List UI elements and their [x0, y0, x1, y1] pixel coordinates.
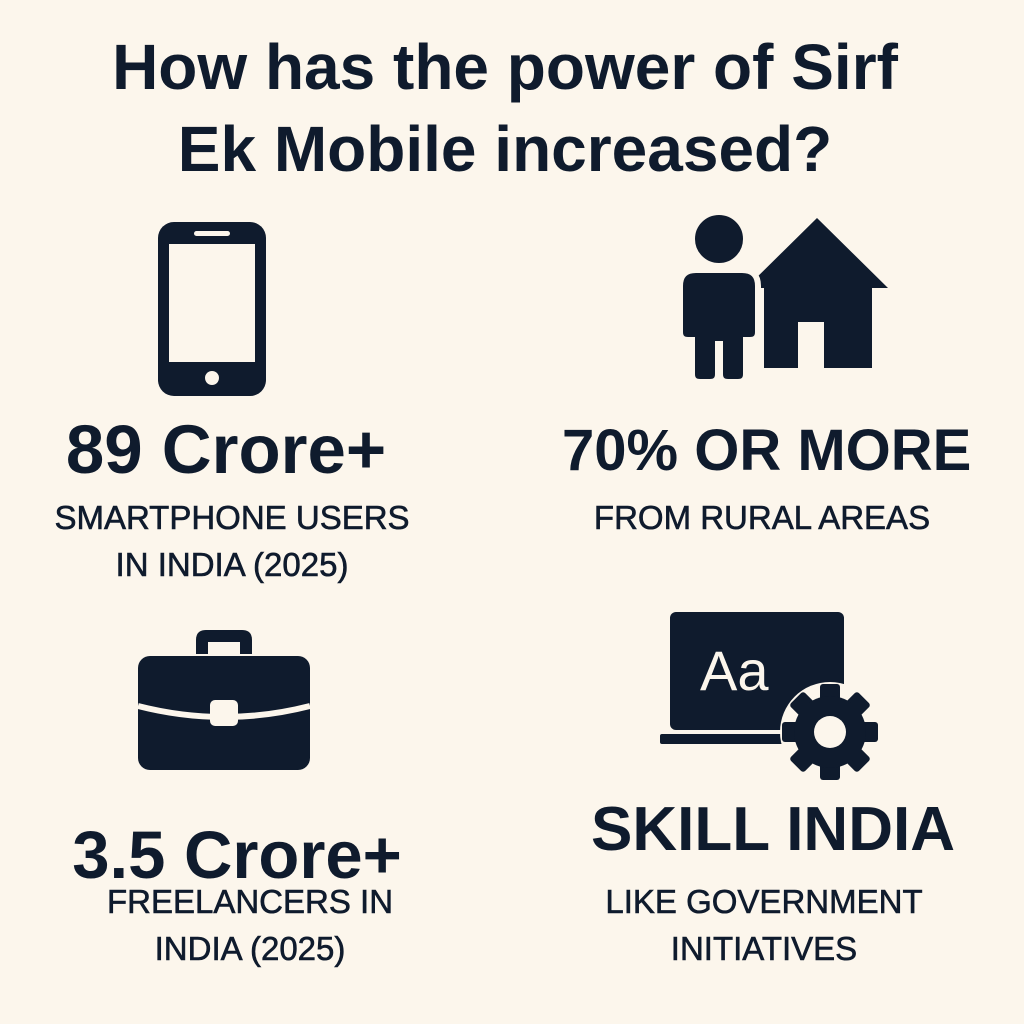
- text: government initiatives: INITIATIVES: [671, 930, 857, 967]
- title: How has the power of Sirf: [112, 31, 898, 103]
- text: smartphone users: IN INDIA (2025): [116, 546, 348, 583]
- text: government initiatives: LIKE GOVERNMENT: [605, 883, 923, 920]
- icon: person and house: [683, 215, 888, 379]
- stat: 3.5 Crore+: 3.5 Crore+: [72, 818, 402, 893]
- text: freelancers: FREELANCERS IN: [107, 883, 393, 920]
- icon: briefcase: [138, 630, 310, 770]
- icon: smartphone: [158, 222, 266, 396]
- icon: laptop with Aa and gear: [660, 612, 878, 780]
- title: Ek Mobile increased?: [178, 113, 832, 185]
- stat: 70% or more: 70% OR MORE: [562, 418, 971, 483]
- text: freelancers: [107, 883, 393, 968]
- text: smartphone users: [54, 499, 410, 584]
- icon: laptop with Aa and gear: Aa: [700, 639, 769, 702]
- text: smartphone users: SMARTPHONE USERS: [54, 499, 410, 536]
- title: [112, 31, 898, 185]
- text: government initiatives: [605, 883, 923, 967]
- stat: Skill India: SKILL INDIA: [591, 795, 955, 864]
- stat: 89 Crore+: 89 Crore+: [66, 411, 386, 488]
- text: freelancers: INDIA (2025): [155, 930, 345, 967]
- text: from rural areas: FROM RURAL AREAS: [594, 499, 930, 536]
